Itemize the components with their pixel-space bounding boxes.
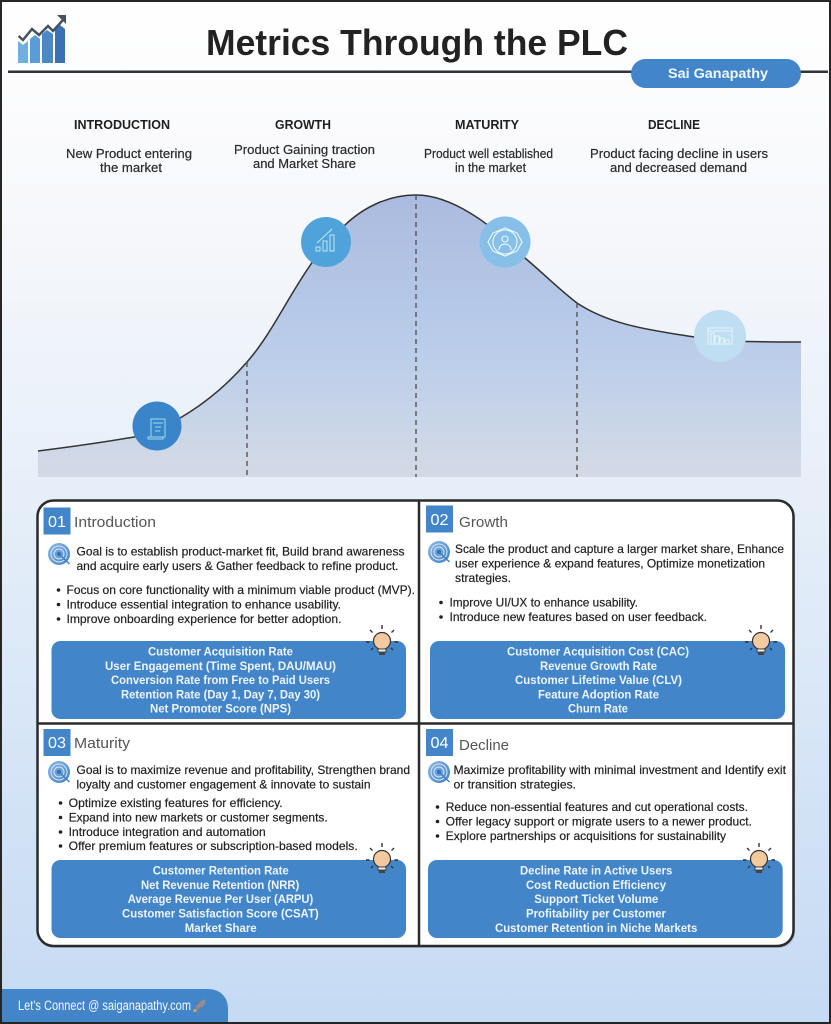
stage heading: maturity: MATURITY (455, 118, 520, 132)
icon: scroll marker (132, 402, 182, 450)
icon: user network marker (480, 216, 530, 268)
icon: light bulb (366, 625, 398, 655)
panel: growth (426, 506, 785, 719)
metrics box: Average Revenue Per User (ARPU) (128, 894, 313, 906)
metrics box (430, 641, 785, 719)
bullet list: Introduce essential integration to enhance usability. (66, 598, 341, 612)
goal text (76, 763, 410, 792)
bullet list: Improve UI/UX to enhance usability. (450, 596, 638, 610)
goal text: user experience & expand features, Optimize monetization (455, 556, 765, 570)
metrics box: Net Promoter Score (NPS) (150, 704, 291, 716)
metrics box: Conversion Rate from Free to Paid Users (111, 675, 330, 687)
title: Metrics Through the PLC (206, 22, 628, 63)
bullet list: Introduce integration and automation (69, 825, 266, 839)
bullet list: Improve onboarding experience for better adoption. (66, 612, 342, 626)
stage heading: maturity: in the market (455, 161, 527, 175)
stage heading: decline (590, 118, 768, 175)
metrics box: Market Share (185, 923, 257, 935)
metrics box: Profitability per Customer (526, 908, 667, 920)
metrics box (52, 860, 406, 938)
goal text (454, 763, 787, 792)
footer banner: Let's Connect @ saiganapathy.com (18, 998, 191, 1013)
bullet list: Optimize existing features for efficiency. (69, 796, 283, 810)
icon: rising bars marker (301, 217, 351, 267)
icon: light bulb (743, 843, 775, 873)
goal text: and acquire early users & Gather feedback to refine product. (76, 559, 398, 573)
panel: introduction (44, 508, 415, 719)
metrics box: User Engagement (Time Spent, DAU/MAU) (105, 661, 336, 673)
goal text: loyalty and customer engagement & innovate to sustain (76, 778, 370, 792)
goal text: strategies. (455, 571, 511, 585)
stage heading: growth (234, 118, 375, 171)
bullet list (439, 596, 707, 624)
stage heading: decline: Product facing decline in users (590, 147, 768, 161)
metrics box: Customer Acquisition Cost (CAC) (507, 646, 689, 658)
icon: target (428, 761, 450, 783)
stage heading: growth: GROWTH (275, 118, 331, 132)
goal text: Scale the product and capture a larger market share, Enhance (455, 542, 784, 556)
goal text: Goal is to establish product-market fit, Build brand awareness (76, 544, 404, 558)
metrics box: Churn Rate (568, 704, 628, 716)
metrics box: Decline Rate in Active Users (520, 866, 672, 878)
bullet list: Expand into new markets or customer segments. (69, 810, 328, 824)
metrics box: Net Revenue Retention (NRR) (141, 880, 299, 892)
stage heading: decline: and decreased demand (610, 161, 747, 175)
badge 03: 03 (48, 735, 66, 752)
stage heading: introduction: New Product entering (66, 147, 192, 161)
bullet list: Offer legacy support or migrate users to a newer product. (446, 814, 752, 828)
bullet list: Focus on core functionality with a minimum viable product (MVP). (66, 583, 415, 597)
metrics box: Revenue Growth Rate (540, 661, 657, 673)
chart: product life cycle curve (38, 195, 801, 477)
icon: target (48, 543, 70, 565)
icon: rocket (193, 999, 206, 1012)
badge 01: 01 (48, 514, 66, 531)
bullet list (57, 583, 415, 626)
heading: maturity: Maturity (74, 735, 131, 752)
panel: decline (426, 729, 787, 938)
stage heading: maturity: Product well established (424, 147, 553, 161)
metrics box: Customer Lifetime Value (CLV) (515, 675, 682, 687)
metrics box (428, 860, 783, 938)
bullet list (59, 796, 358, 853)
icon: light bulb (366, 843, 398, 873)
metrics box: Customer Retention in Niche Markets (495, 923, 697, 935)
metrics box: Support Ticket Volume (534, 894, 658, 906)
panel: stage cards frame (38, 500, 795, 948)
author pill: Sai Ganapathy (668, 65, 768, 81)
stage heading: decline: DECLINE (648, 118, 700, 132)
metrics box: Customer Satisfaction Score (CSAT) (122, 908, 319, 920)
metrics box: Customer Retention Rate (153, 866, 289, 878)
badge 04: 04 (430, 735, 449, 752)
badge 03 (44, 729, 70, 756)
goal text: or transition strategies. (454, 778, 576, 792)
icon: target (428, 541, 450, 563)
bullet list: Explore partnerships or acquisitions for sustainability (446, 829, 726, 843)
stage heading: growth: and Market Share (253, 157, 356, 171)
icon: growth chart logo (18, 15, 66, 63)
goal text (455, 542, 784, 585)
stage heading: introduction: the market (100, 161, 163, 175)
stage heading: maturity (424, 118, 553, 175)
footer banner (2, 989, 228, 1022)
badge 02: 02 (430, 512, 449, 529)
heading: decline: Decline (459, 737, 509, 754)
icon: browser chart marker (694, 310, 746, 362)
badge 02 (426, 506, 453, 532)
stage heading: growth: Product Gaining traction (234, 143, 375, 157)
goal text: Goal is to maximize revenue and profitability, Strengthen brand (76, 763, 410, 777)
metrics box: Cost Reduction Efficiency (526, 880, 667, 892)
bullet list (436, 800, 752, 843)
metrics box (52, 641, 406, 719)
heading: introduction: Introduction (74, 514, 156, 531)
header rule (8, 70, 828, 73)
stage heading: introduction: INTRODUCTION (74, 118, 170, 132)
author pill (631, 59, 801, 88)
panel: maturity (44, 729, 410, 938)
icon: light bulb (745, 625, 777, 655)
icon: target (48, 761, 70, 783)
bullet list: Reduce non-essential features and cut operational costs. (446, 800, 748, 814)
goal text (76, 544, 404, 573)
bullet list: Introduce new features based on user feedback. (450, 610, 707, 624)
bullet list: Offer premium features or subscription-based models. (69, 839, 358, 853)
badge 01 (44, 508, 70, 534)
stage heading: introduction (66, 118, 192, 175)
heading: growth: Growth (459, 514, 508, 531)
metrics box: Customer Acquisition Rate (148, 646, 293, 658)
metrics box: Feature Adoption Rate (538, 690, 659, 702)
badge 04 (426, 729, 453, 756)
goal text: Maximize profitability with minimal investment and Identify exit (454, 763, 787, 777)
metrics box: Retention Rate (Day 1, Day 7, Day 30) (121, 690, 320, 702)
